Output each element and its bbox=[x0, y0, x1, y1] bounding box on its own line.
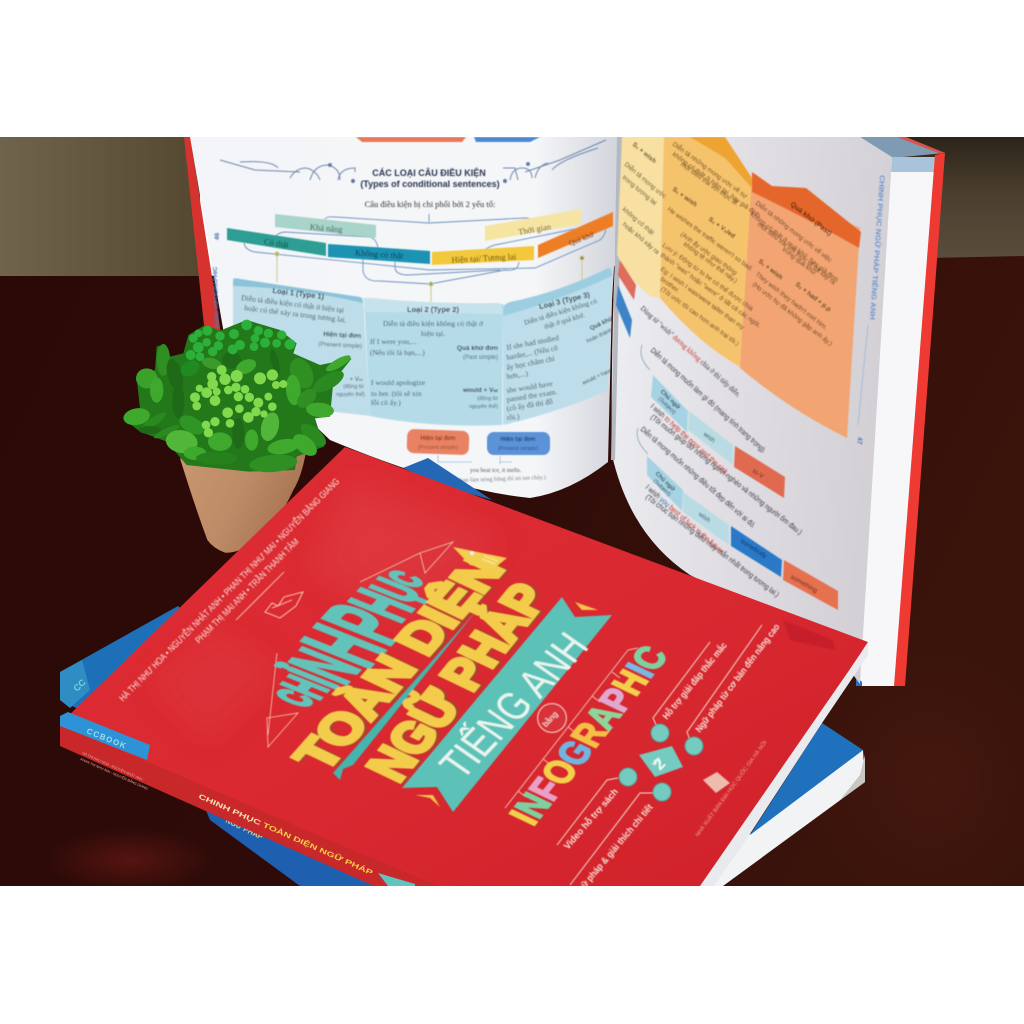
feature labels: Video hỗ trợ sách bbox=[562, 787, 621, 852]
pencil icon bbox=[453, 547, 507, 570]
panel: type 1: nguyên thể) bbox=[336, 391, 365, 398]
column text: hoặc khó xảy ra bbox=[621, 221, 661, 256]
panel: type 2: If I were you,... bbox=[370, 337, 417, 346]
light yellow column bbox=[617, 137, 666, 298]
teal divider bbox=[333, 610, 477, 780]
panel: type 2: hiện tại. bbox=[421, 329, 445, 338]
heading ornaments bbox=[220, 140, 606, 183]
cover reflection bbox=[783, 620, 835, 650]
column text: S₂ + V₂/ed bbox=[707, 216, 736, 240]
bar: Quá khứ: Quá khứ bbox=[567, 229, 596, 248]
bang badge bbox=[538, 704, 566, 732]
cover bbox=[60, 447, 868, 886]
bottom formula pills: (Present simple) bbox=[418, 445, 458, 451]
bang badge: bằng bbox=[541, 710, 560, 729]
upright open book bbox=[184, 137, 945, 686]
bottom formula pills: Hiện tại đơn bbox=[421, 436, 456, 442]
example lines row 1: (Tôi muốn giúp đỡ những người nghèo và những người ốm đau.) bbox=[649, 412, 804, 537]
volume diamond: 2 bbox=[651, 755, 669, 774]
column text: trong tương lai bbox=[621, 174, 658, 207]
orange column header bbox=[752, 172, 861, 248]
bottom formula pills: (Present simple) bbox=[498, 446, 538, 452]
red back cover left bbox=[184, 137, 222, 340]
blue top corner bbox=[403, 458, 492, 500]
column text: Lưu ý: Động từ to be có thể được chia bbox=[661, 241, 755, 313]
dark buds bbox=[186, 320, 295, 361]
example lines row 2: I wish you best of luck in the future. bbox=[644, 483, 727, 557]
cover gloss bbox=[150, 480, 500, 740]
blue cover right bbox=[750, 723, 863, 835]
panel: type 2: I would apologize bbox=[371, 378, 426, 387]
structure row 2 bbox=[647, 456, 838, 610]
bar: Thời gian: Thời gian bbox=[517, 221, 552, 237]
top pills cut off bbox=[356, 137, 540, 142]
example lines row 2: Diễn tả mong muốn những điều tốt đẹp đến với ai đó. bbox=[639, 425, 758, 530]
title: chinh phuc: Ụ bbox=[357, 571, 433, 609]
panel: type 3: rồi.) bbox=[506, 412, 520, 422]
connector lines bbox=[557, 625, 762, 885]
heading: (Types of conditional sentences) bbox=[360, 179, 500, 189]
panel: type 3: would + have bbox=[581, 367, 614, 387]
blue book under red book bbox=[60, 458, 865, 886]
panel: type 3: Diễn tả điều kiện không có bbox=[523, 297, 598, 327]
authors bbox=[117, 476, 341, 703]
spine: HÀ THỊ NHƯ HOA - NGUYỄN NHẬT ANH bbox=[82, 750, 144, 782]
subheading: Câu điều kiện bị chi phối bởi 2 yếu tố: bbox=[365, 199, 495, 209]
running header right page bbox=[855, 175, 888, 445]
structure row 1: to-V bbox=[751, 468, 765, 481]
connector brackets bbox=[637, 345, 650, 454]
foliage bbox=[122, 320, 353, 474]
gutter shadow bbox=[611, 137, 623, 460]
authors: PHẠM THỊ MAI ANH • TRẦN THANH TÂM bbox=[193, 536, 301, 645]
right page bbox=[612, 137, 892, 684]
title: chinh phuc: Ỉ bbox=[274, 661, 352, 695]
column text: (Anh ấy ước giao thông bbox=[679, 229, 740, 277]
column text: (Tôi ước tôi cao hơn anh trai tôi.) bbox=[659, 286, 740, 348]
side label left page: 46 bbox=[214, 232, 221, 240]
panel: type 3: she would have bbox=[506, 379, 554, 395]
amber column bbox=[660, 137, 752, 368]
structure row 1: Chủ ngữ bbox=[659, 389, 681, 411]
bar: Không có thật: Không có thật bbox=[355, 247, 404, 261]
heading bbox=[360, 167, 500, 189]
feature labels: Ngữ pháp từ cơ bản đến nâng cao bbox=[694, 622, 783, 735]
panel: type 2: lỗi cô ấy.) bbox=[371, 398, 401, 407]
blue book under red book: CC bbox=[71, 677, 88, 693]
pot bbox=[180, 452, 306, 553]
blue spine bbox=[205, 808, 375, 886]
example lines row 1 bbox=[649, 346, 804, 537]
bottom formula pills bbox=[407, 429, 550, 484]
right page contents bbox=[616, 137, 888, 610]
stems to panels bbox=[275, 252, 584, 302]
column text: thành "was" hoặc "were" ở tất cả các ngôi. bbox=[659, 250, 763, 330]
volume diamond bbox=[639, 746, 683, 777]
panel: type 3: ấy học chăm chỉ bbox=[506, 354, 555, 372]
connector lines bbox=[244, 214, 606, 284]
panel: type 2: would + Vₙₜ bbox=[462, 387, 498, 394]
running header right page: CHINH PHỤC NGỮ PHÁP TIẾNG ANH bbox=[868, 175, 888, 320]
plant bbox=[122, 320, 353, 553]
column text: không có thật bbox=[621, 206, 655, 237]
side label left page: BẰNG INFOGRAPHIC bbox=[211, 266, 221, 328]
condition bars bbox=[227, 209, 613, 265]
panel: type 3 bbox=[503, 267, 615, 425]
panel: type 2: to her. (tôi sẽ xin bbox=[371, 389, 422, 398]
panel: type 1: hoặc có thể xảy ra trong tương lai. bbox=[244, 303, 347, 325]
panel: type 3: Quá khứ bbox=[589, 316, 615, 332]
title: chinh phuc: H bbox=[280, 613, 408, 679]
bar: Khả năng bbox=[275, 214, 376, 238]
column text: trong quá khứ. bbox=[781, 246, 819, 278]
column text: S₁ + wish bbox=[671, 186, 698, 209]
ribbon text: TIẾNG ANH bbox=[429, 624, 599, 787]
title: ngu phap: NGỮ PHÁP bbox=[355, 575, 561, 789]
panel: type 3: hơn,...) bbox=[506, 369, 529, 381]
structure row 2: something bbox=[789, 574, 819, 595]
table reflections bbox=[45, 640, 1024, 920]
panel: type 2: nguyên thể) bbox=[469, 403, 498, 410]
crown doodle bbox=[265, 592, 303, 618]
column text: S₁ + wish bbox=[631, 141, 657, 165]
panel: type 3: hoàn thành bbox=[586, 328, 613, 345]
ccbook tab bbox=[60, 712, 150, 760]
panel: type 2: Loại 2 (Type 2) bbox=[407, 305, 459, 314]
feature labels: Hỗ trợ giải đáp thắc mắc bbox=[660, 640, 730, 722]
title: chinh phuc: H bbox=[332, 580, 431, 630]
panel: type 1: + Vₙₜ bbox=[350, 377, 363, 383]
panel: type 3: passed the exam. bbox=[506, 387, 558, 404]
wish sentence: Dùng từ "wish" dương không chia ở thì tiếp diễn. bbox=[639, 304, 743, 399]
column text: không có thật ở quá khứ, hay giả định bbox=[749, 210, 840, 284]
white band bottom bbox=[0, 886, 1024, 1024]
bar: Có thật: Có thật bbox=[263, 236, 290, 250]
structure row 2: Chủ ngữ bbox=[654, 471, 676, 493]
table bbox=[0, 256, 1024, 886]
column text: một điều trái với thực tế đã xảy ra bbox=[756, 219, 838, 287]
wall left bbox=[0, 137, 200, 277]
heading: CÁC LOẠI CÂU ĐIỀU KIỆN bbox=[372, 167, 486, 178]
panel: type 2 bbox=[364, 298, 503, 426]
column text: không có thật ở hiện tại, hay giả định bbox=[671, 150, 762, 219]
foliage silhouette bbox=[125, 320, 352, 472]
column text: (Họ ước họ đã không gặp anh ấy.) bbox=[751, 279, 834, 348]
column text: Diễn tả những mong ước về việc bbox=[754, 198, 835, 265]
title: chinh phuc: H bbox=[270, 669, 341, 705]
light buds bbox=[190, 365, 287, 437]
title: toan dien: TOÀN DIỆN bbox=[284, 547, 519, 778]
structure row 1: wish bbox=[701, 430, 717, 445]
panel: type 2: Quá khứ đơn bbox=[457, 345, 498, 352]
bottom formula pills: bạn làm nóng băng thì nó tan chảy.) bbox=[460, 474, 546, 484]
bar: Không có thật bbox=[328, 244, 430, 264]
title outlines bbox=[267, 542, 453, 747]
cover edge pages bbox=[700, 643, 868, 886]
panel: type 2: (Nếu tôi là bạn,...) bbox=[370, 348, 425, 357]
panel: type 3: If she had studied bbox=[506, 333, 560, 352]
title: ngu phap: NGỮ PHÁP bbox=[358, 575, 564, 789]
author divider bbox=[236, 572, 284, 620]
wall right bbox=[900, 137, 1024, 259]
infographic tree line bbox=[505, 648, 638, 808]
column text: Eg: I wish I was/were taller than my bbox=[659, 266, 746, 332]
panel: type 1: Loại 1 (Type 1) bbox=[272, 286, 325, 301]
column text: một điều trái với thực tế. bbox=[679, 159, 741, 208]
blue right pages bbox=[700, 750, 865, 886]
panel: type 3: thật ở quá khứ. bbox=[543, 311, 586, 331]
spine: CHINH PHỤC TOÀN DIỆN NGỮ PHÁP bbox=[197, 792, 375, 877]
example lines row 1: I wish to help the poor and the sick. bbox=[649, 402, 731, 477]
panel: type 1: (Present simple) bbox=[318, 342, 362, 350]
panel: type 2: (Past simple) bbox=[463, 355, 498, 361]
example lines row 1: Diễn tả mong muốn làm gì đó (mang tính trang trọng). bbox=[649, 346, 768, 455]
orange column bbox=[740, 176, 860, 438]
authors: HÀ THỊ NHƯ HOA • NGUYỄN NHẬT ANH • PHAN THỊ NHƯ MAI • NGUYỄN BẰNG GIANG bbox=[117, 476, 341, 703]
column text: Diễn tả những mong ước về sự bbox=[671, 139, 750, 201]
column text: Diễn tả mong ước bbox=[623, 160, 669, 201]
column text: They wish they hadn't met him. bbox=[754, 271, 829, 332]
bottom formula pills: Hiện tại đơn bbox=[501, 437, 536, 443]
bar: Quá khứ bbox=[538, 212, 613, 258]
column text bbox=[621, 139, 840, 348]
panel: type 1: Diễn tả điều kiện có thật ở hiện tại bbox=[241, 293, 345, 315]
panel: type 2: Diễn tả điều kiện không có thật ở bbox=[383, 319, 484, 328]
panel: type 3: harder,... (Nếu cô bbox=[506, 343, 559, 362]
title: chinh phuc: N bbox=[271, 639, 379, 693]
feature dots bbox=[619, 724, 703, 801]
example lines row 2: (Tôi chúc bạn những điều may mắn nhất trong tương lai.) bbox=[644, 492, 781, 599]
bar: Hiện tại/ Tương lai: Hiện tại/ Tương lai bbox=[451, 251, 517, 265]
feature labels: Ngữ pháp & giải thích chi tiết bbox=[572, 802, 656, 899]
column text: S₁ + wish bbox=[757, 258, 784, 281]
volume diamond: TẬP bbox=[650, 756, 663, 768]
panel: type 1: Hiện tại đơn bbox=[323, 331, 361, 340]
bar: Có thật bbox=[227, 228, 326, 256]
structure row 2: wish bbox=[696, 510, 712, 524]
blue left edge bbox=[60, 606, 215, 715]
side label left page bbox=[211, 232, 221, 328]
panel: type 3: Loại 3 (Type 3) bbox=[538, 290, 591, 311]
side tabs bbox=[616, 260, 636, 338]
bottom formula pills: you heat ice, it melts. bbox=[470, 468, 522, 474]
bar: Hiện tại/ Tương lai bbox=[432, 246, 534, 265]
spine bbox=[60, 722, 436, 886]
structure row 2: somebody bbox=[739, 538, 769, 560]
right side page block and cover bbox=[856, 137, 945, 686]
red book bbox=[60, 447, 868, 899]
white band top bbox=[0, 0, 1024, 137]
column text: brother. bbox=[659, 276, 681, 295]
ccbook tab: CCBOOK bbox=[85, 727, 128, 751]
feature labels bbox=[562, 622, 783, 899]
column text: không tệ như thế này.) bbox=[682, 239, 740, 285]
title: chinh phuc: P bbox=[301, 592, 428, 656]
ribbon bbox=[402, 597, 612, 812]
title: toan dien: TOÀN DIỆN bbox=[281, 547, 516, 778]
blue book under red book: NGỮ PHÁP bbox=[224, 816, 264, 842]
column text: He wishes the traffic weren't so bad. bbox=[666, 206, 754, 273]
structure row 1 bbox=[651, 375, 785, 498]
bar: Thời gian bbox=[485, 209, 581, 241]
panel: type 3: (cô ấy đã thi đỗ bbox=[506, 397, 554, 413]
structure row 2: (Subject) bbox=[652, 478, 672, 498]
spine: PHAN THỊ NHƯ MAI - NGUYỄN BẰNG GIANG bbox=[80, 756, 149, 791]
left page bbox=[190, 137, 622, 498]
structure row 1: (Subject) bbox=[657, 396, 677, 416]
infographic wordmark: INFOGRAPHIC bbox=[501, 640, 677, 831]
panel: type 1: (động từ bbox=[343, 384, 364, 390]
title: chinh phuc: C bbox=[380, 566, 433, 593]
running header right page: 47 bbox=[855, 437, 863, 445]
column text: S₂ + had + p.p bbox=[794, 281, 832, 313]
left page contents bbox=[211, 137, 615, 484]
bar: Khả năng: Khả năng bbox=[309, 222, 344, 234]
title: chinh phuc: C bbox=[266, 684, 323, 713]
panel: type 2: (động từ bbox=[477, 396, 498, 402]
column text: Quá khứ (Past) bbox=[789, 201, 833, 237]
panel: type 1 bbox=[233, 278, 370, 416]
publisher: NHÀ XUẤT BẢN ĐẠI HỌC QUỐC GIA HÀ NỘI bbox=[694, 739, 769, 838]
